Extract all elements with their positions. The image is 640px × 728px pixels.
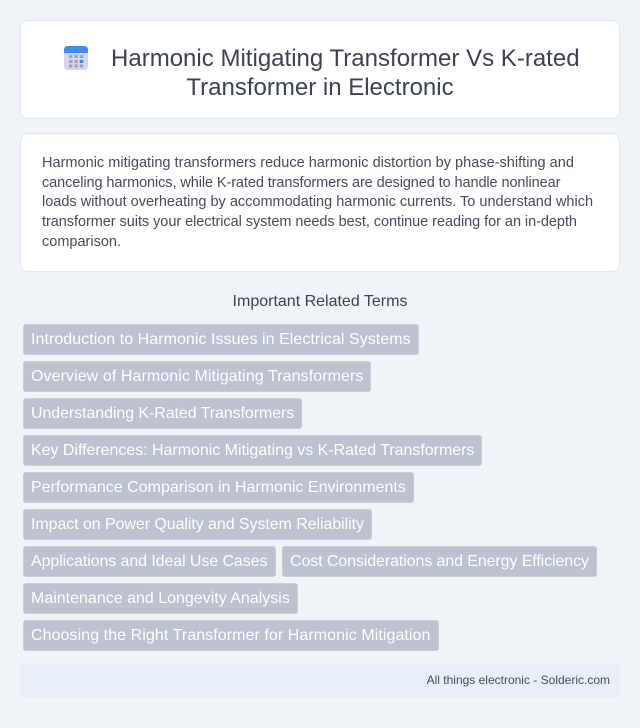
section heading: important related terms: Important Related Terms bbox=[233, 293, 407, 310]
tag bbox=[23, 324, 419, 355]
description card bbox=[20, 133, 620, 272]
description text: loads without overheating by accommodating harmonic currents. To understand which bbox=[42, 194, 593, 210]
footer bbox=[20, 664, 620, 698]
tag bbox=[23, 361, 371, 392]
title: Harmonic Mitigating Transformer Vs K-rated bbox=[111, 45, 580, 72]
tag bbox=[23, 472, 414, 503]
tag: Introduction to Harmonic Issues in Electrical Systems bbox=[31, 331, 411, 348]
tag: Maintenance and Longevity Analysis bbox=[31, 590, 290, 607]
tag: Choosing the Right Transformer for Harmonic Mitigation bbox=[31, 627, 430, 644]
tag: Performance Comparison in Harmonic Environments bbox=[31, 479, 406, 496]
tag bbox=[23, 546, 276, 577]
tag bbox=[23, 509, 372, 540]
tag bbox=[23, 435, 482, 466]
description text bbox=[42, 155, 593, 250]
tag bbox=[23, 583, 298, 614]
tag: Overview of Harmonic Mitigating Transformers bbox=[31, 368, 364, 385]
tag: Understanding K-Rated Transformers bbox=[31, 405, 294, 422]
tag bbox=[282, 546, 597, 577]
tag bbox=[23, 620, 439, 651]
tag: Applications and Ideal Use Cases bbox=[31, 553, 267, 570]
description text: comparison. bbox=[42, 234, 121, 250]
title bbox=[111, 45, 580, 101]
tag bbox=[23, 398, 302, 429]
tag: Impact on Power Quality and System Reliability bbox=[31, 516, 364, 533]
description text: canceling harmonics, while K-rated transformers are designed to handle nonlinear bbox=[42, 175, 560, 191]
tag: Key Differences: Harmonic Mitigating vs K-Rated Transformers bbox=[31, 442, 474, 459]
header card bbox=[20, 20, 620, 119]
tag list bbox=[23, 324, 597, 651]
description text: Harmonic mitigating transformers reduce harmonic distortion by phase-shifting and bbox=[42, 155, 574, 171]
description text: transformer suits your electrical system needs best, continue reading for an in-depth bbox=[42, 214, 577, 230]
footer text: All things electronic - Solderic.com bbox=[427, 673, 610, 687]
title: Transformer in Electronic bbox=[186, 74, 454, 101]
tag: Cost Considerations and Energy Efficiency bbox=[290, 553, 589, 570]
icon: calendar bbox=[64, 46, 88, 70]
